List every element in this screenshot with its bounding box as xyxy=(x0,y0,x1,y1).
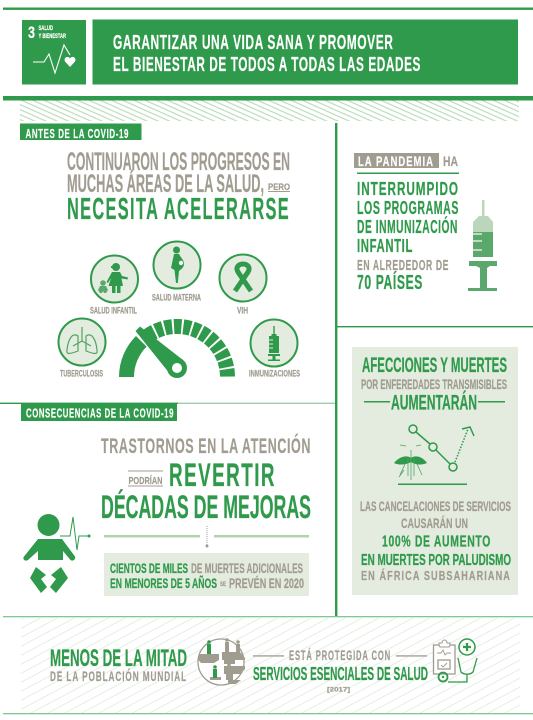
heading: progress: MUCHAS ÁREAS DE LA SALUD, xyxy=(67,169,264,198)
section label: consecuencias xyxy=(21,404,177,421)
goal badge: SDG 3 xyxy=(22,20,86,84)
icon labels xyxy=(60,292,300,378)
callout: cientos de miles: CIENTOS DE MILES xyxy=(110,561,188,576)
icon: clipboard and stethoscope xyxy=(434,639,477,682)
callout: cientos de miles: PREVÉN EN 2020 xyxy=(229,576,304,591)
heading: progress: NECESITA ACELERARSE xyxy=(67,192,290,226)
heading: trastornos: PODRÍAN xyxy=(128,474,162,487)
panel: afecciones y muertes xyxy=(352,347,518,595)
title banner xyxy=(92,20,518,84)
icon: tuberculosis lungs xyxy=(58,318,106,366)
goal badge: SDG 3: Y BIENESTAR xyxy=(38,33,66,40)
icon labels: TUBERCULOSIS xyxy=(60,368,103,378)
panel: pandemia interrumpe inmunización: LA PANDEMIA xyxy=(358,153,434,169)
panel: pandemia interrumpe inmunización: 70 PAÍSES xyxy=(357,271,423,294)
callout: cientos de miles: SE xyxy=(220,582,226,588)
footer panel: servicios esenciales: DE LA POBLACIÓN MUNDIAL xyxy=(50,669,187,684)
heading: trastornos: REVERTIR xyxy=(169,457,276,493)
gauge xyxy=(126,326,228,378)
footer panel: servicios esenciales: ESTÁ PROTEGIDA CON xyxy=(289,648,391,663)
goal badge: SDG 3: 3 xyxy=(28,23,35,42)
callout: cientos de miles: EN MENORES DE 5 AÑOS xyxy=(110,576,217,591)
icon labels: SALUD INFANTIL xyxy=(90,306,137,316)
footer panel: servicios esenciales xyxy=(3,616,533,714)
icon: inmunizaciones syringe xyxy=(250,320,298,366)
panel: afecciones y muertes: CAUSARÁN UN xyxy=(401,515,468,531)
icon: salud infantil xyxy=(91,256,138,302)
panel: pandemia interrumpe inmunización: INFANTIL xyxy=(357,235,413,256)
icon: mosquito and trend chart xyxy=(394,425,474,485)
icon: syringe xyxy=(468,200,497,291)
panel: pandemia interrumpe inmunización: HA xyxy=(443,153,458,169)
heading: trastornos: TRASTORNOS EN LA ATENCIÓN xyxy=(101,433,311,458)
section label: antes de la covid-19: ANTES DE LA COVID-19 xyxy=(26,126,129,141)
panel: pandemia interrumpe inmunización: LOS PROGRAMAS xyxy=(357,197,459,218)
section label: antes de la covid-19 xyxy=(20,124,142,141)
divider with dotted connector xyxy=(104,526,309,548)
callout: cientos de miles xyxy=(104,553,309,596)
panel: pandemia interrumpe inmunización: EN ALREDEDOR DE xyxy=(357,258,449,274)
heading: progress xyxy=(67,148,290,226)
icon: baby xyxy=(23,514,91,593)
icon: people in circle xyxy=(198,638,245,685)
icon labels: INMUNIZACIONES xyxy=(249,368,300,378)
footer panel: servicios esenciales: MENOS DE LA MITAD xyxy=(50,645,187,672)
heading: trastornos: DÉCADAS DE MEJORAS xyxy=(101,489,311,525)
footer panel: servicios esenciales: [2017] xyxy=(327,686,350,694)
panel: pandemia interrumpe inmunización: INTERRUMPIDO xyxy=(357,178,459,199)
icon: vih ribbon xyxy=(220,254,266,302)
text: CONTINUARON LOS PROGRESOS EN xyxy=(67,148,290,176)
section label: consecuencias: CONSECUENCIAS DE LA COVID-19 xyxy=(26,406,174,420)
icon: salud materna xyxy=(154,242,200,288)
icon labels: VIH xyxy=(237,306,248,316)
panel: pandemia interrumpe inmunización xyxy=(354,153,459,294)
heading: progress: PERO xyxy=(268,182,290,192)
goal badge: SDG 3: SALUD xyxy=(38,25,53,32)
heading: trastornos xyxy=(101,433,311,525)
callout: cientos de miles: DE MUERTES ADICIONALES xyxy=(191,561,303,576)
icon labels: SALUD MATERNA xyxy=(152,292,201,302)
